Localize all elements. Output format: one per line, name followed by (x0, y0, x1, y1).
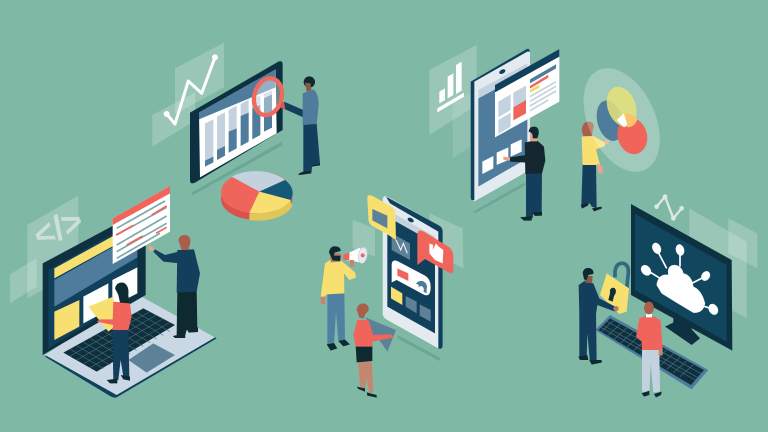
yellow chat bubble (367, 195, 396, 240)
monitor (631, 204, 732, 351)
woman in red top (88, 283, 132, 383)
padlock (600, 263, 629, 314)
man in red sweater (636, 302, 663, 397)
floating web page (495, 49, 559, 137)
scene: desktop security (578, 194, 757, 397)
man in blue sweater (284, 76, 320, 175)
floating code panel: </> (28, 202, 89, 256)
keyboard (595, 315, 708, 389)
pie chart (221, 171, 293, 221)
laptop (43, 208, 217, 398)
floating code panel (10, 196, 89, 303)
tablet with bar chart (190, 61, 283, 195)
phone (383, 196, 443, 361)
scene: smartphone marketing (321, 195, 463, 398)
woman in yellow top (581, 122, 609, 211)
scene: website tablet and venn (429, 45, 675, 221)
tablet (471, 49, 530, 213)
floating line chart (152, 43, 224, 147)
keyboard (63, 308, 175, 372)
woman in red blouse (353, 303, 396, 398)
floating side panels (353, 213, 463, 268)
red chat bubble with thumb up (417, 231, 453, 273)
magnifying glass (250, 75, 287, 118)
floating bar chart (429, 45, 477, 158)
man in black sweater (503, 127, 545, 221)
venn diagram (568, 56, 675, 184)
trackpad (128, 343, 175, 373)
man in navy jacket (148, 235, 200, 338)
scene: tablet analytics (152, 43, 320, 221)
floating panels and network icon (654, 194, 757, 318)
floating text panel (113, 186, 170, 264)
cloud network icon (639, 242, 720, 316)
man with megaphone (321, 246, 368, 351)
man holding padlock (578, 268, 619, 365)
scene: laptop (10, 186, 217, 398)
